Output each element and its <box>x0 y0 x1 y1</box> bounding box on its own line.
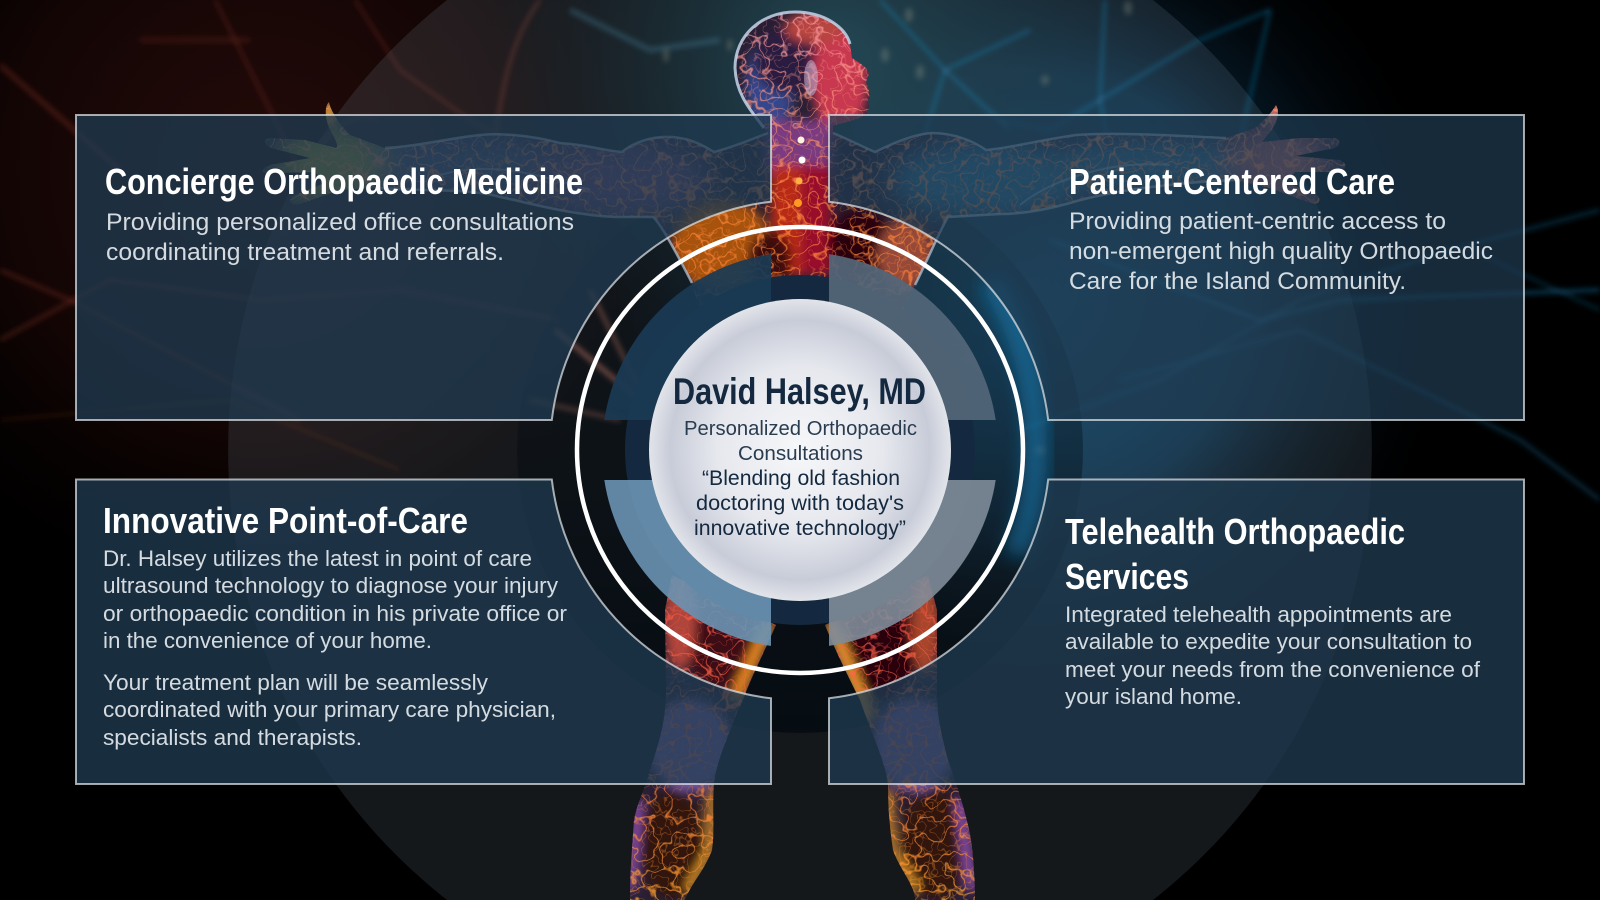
text: Telehealth Orthopaedic Services: available to expedite your consultation to <box>1065 629 1472 654</box>
quadrant: top right <box>829 254 996 420</box>
text: Innovative Point-of-Care: coordinated with your primary care physician, <box>103 697 556 722</box>
center text: David Halsey, MD <box>673 371 926 412</box>
text: Innovative Point-of-Care: or orthopaedic condition in his private office or <box>103 601 568 626</box>
text: Telehealth Orthopaedic Services <box>1065 511 1481 709</box>
center text: doctoring with today's <box>696 491 904 515</box>
text: Innovative Point-of-Care: Dr. Halsey utilizes the latest in point of care <box>103 546 532 571</box>
text: Innovative Point-of-Care <box>103 500 568 750</box>
quadrant: bottom right <box>829 480 996 646</box>
text: Innovative Point-of-Care: Innovative Point-of-Care <box>103 500 468 541</box>
text: Patient-Centered Care: Providing patient-centric access to <box>1069 208 1446 235</box>
text: Concierge Orthopaedic Medicine: Concierge Orthopaedic Medicine <box>105 161 583 202</box>
panel: Patient-Centered Care <box>829 115 1524 420</box>
text: Telehealth Orthopaedic Services: meet your needs from the convenience of <box>1065 657 1481 682</box>
text: Telehealth Orthopaedic Services: Integrated telehealth appointments are <box>1065 602 1452 627</box>
center text: Consultations <box>738 442 863 465</box>
text: Innovative Point-of-Care: specialists and therapists. <box>103 725 362 750</box>
figure outline and spine lights <box>375 12 1235 285</box>
text: Patient-Centered Care: Care for the Island Community. <box>1069 268 1406 295</box>
center sphere <box>649 299 951 601</box>
quadrant: bottom left <box>604 480 771 646</box>
panel: Concierge Orthopaedic Medicine <box>76 115 771 420</box>
text: Innovative Point-of-Care: in the convenience of your home. <box>103 628 432 653</box>
center text: “Blending old fashion <box>702 466 900 490</box>
text: Patient-Centered Care: Patient-Centered Care <box>1069 161 1395 202</box>
text: Patient-Centered Care: non-emergent high quality Orthopaedic <box>1069 238 1493 265</box>
text: Innovative Point-of-Care: ultrasound technology to diagnose your injury <box>103 573 559 598</box>
ring glow: network behind the rings <box>530 280 1036 555</box>
text: Innovative Point-of-Care: Your treatment plan will be seamlessly <box>103 670 489 695</box>
text: Concierge Orthopaedic Medicine: Providing personalized office consultations <box>106 209 574 236</box>
dark inner circle <box>517 167 1083 733</box>
center text: innovative technology” <box>694 516 906 540</box>
large translucent circle <box>228 0 1372 900</box>
text: Patient-Centered Care <box>1069 161 1493 295</box>
human figure with glowing nerves <box>263 12 1346 900</box>
center text: Personalized Orthopaedic <box>684 417 917 440</box>
text: Concierge Orthopaedic Medicine <box>105 161 583 266</box>
text: Telehealth Orthopaedic Services: your island home. <box>1065 684 1242 709</box>
text: Telehealth Orthopaedic Services: Services <box>1065 556 1189 597</box>
text: Concierge Orthopaedic Medicine: coordinating treatment and referrals. <box>106 239 504 266</box>
central navy ring <box>625 275 975 625</box>
panel: Telehealth Orthopaedic Services <box>829 480 1524 784</box>
white ring <box>577 227 1023 673</box>
text: Telehealth Orthopaedic Services: Telehealth Orthopaedic <box>1065 511 1405 552</box>
panel: Innovative Point-of-Care <box>76 480 771 784</box>
center text <box>673 371 926 540</box>
quadrant: top left <box>604 254 771 420</box>
